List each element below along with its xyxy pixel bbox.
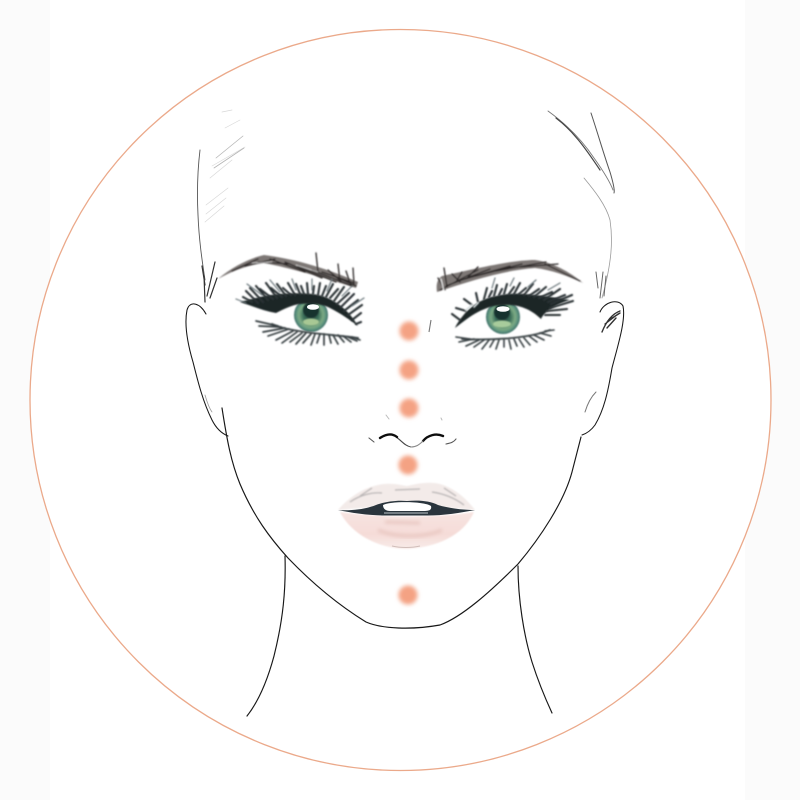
upper lashes right [452,278,573,320]
hairline left [197,110,245,302]
upper lash band left [240,293,358,326]
nose wings [369,438,456,444]
neck left [247,556,285,716]
nostril left [396,437,411,447]
dot 5 [398,586,418,604]
eye highlight left [307,304,319,310]
dot 4 [398,456,418,474]
neck right [518,566,552,713]
ear right [582,302,624,435]
left eye [236,279,364,345]
mouth line [338,501,475,516]
lower lashes right [456,330,554,349]
dot 1 [400,322,418,340]
upper lip shading [350,488,464,505]
eyebrow left [218,253,358,288]
inner ear left [205,395,212,412]
right eye [429,278,573,349]
upper lip [338,483,475,510]
eye highlight right [496,306,510,312]
face outline [186,302,624,716]
inner ear right [602,311,620,332]
ear left [186,304,228,436]
lower lip [340,512,474,549]
lower lip shading [378,522,442,536]
eyebrow right [437,260,583,292]
hairline right [548,111,614,298]
nostril right [423,435,443,441]
lips [338,483,475,549]
lower lashes left [256,321,360,345]
iris left [294,298,328,332]
jaw line [222,408,581,628]
nose [369,415,456,447]
upper lash band right [455,294,570,328]
upper lashes left [236,279,364,324]
crease mark right [429,320,431,332]
dot 2 [400,360,418,380]
teeth [383,502,431,511]
iris right [486,300,520,334]
dot 3 [400,398,418,418]
peach dots [398,322,418,604]
